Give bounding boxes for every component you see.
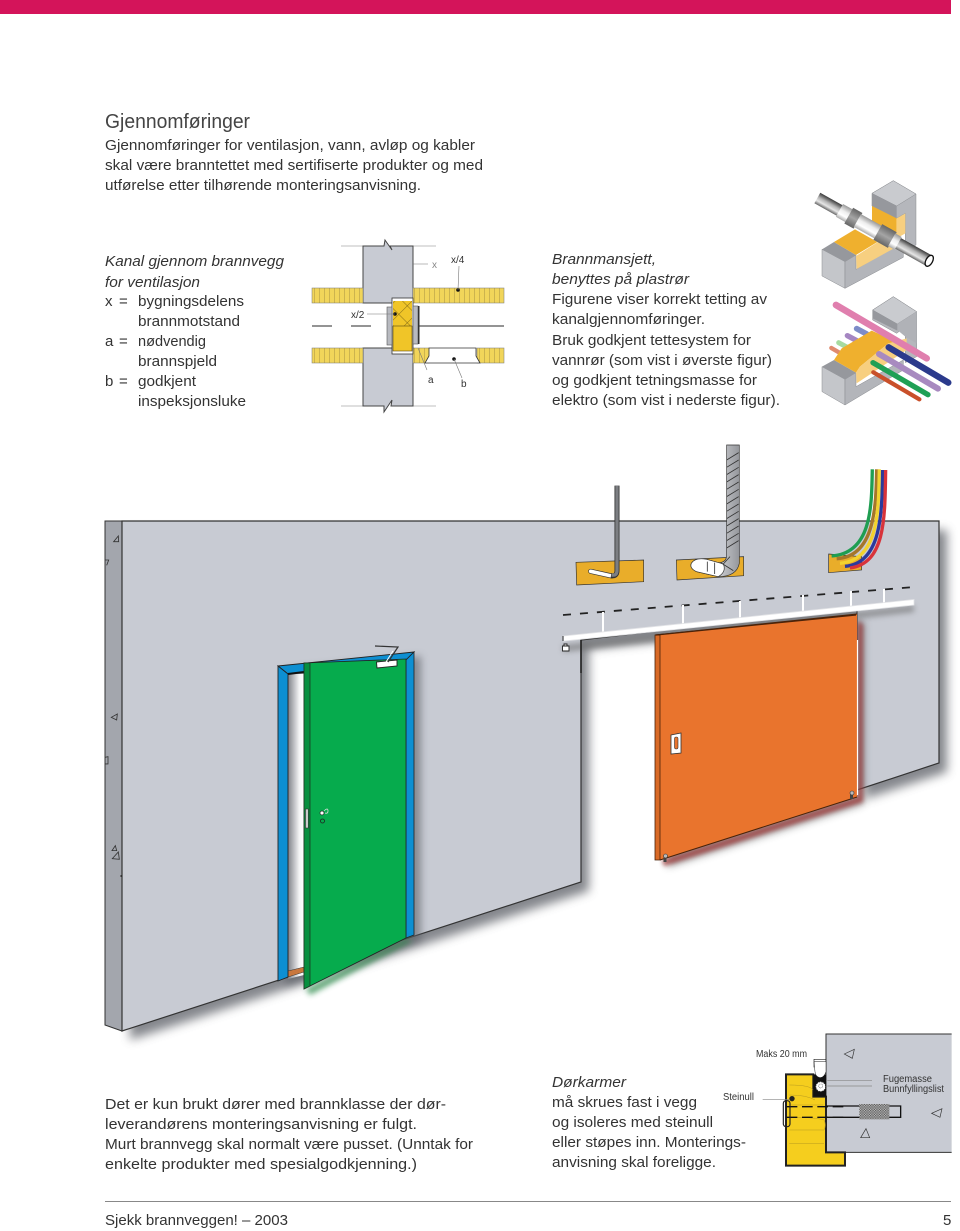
detail screw and anchor <box>787 1107 847 1117</box>
detail dimension lines <box>763 1081 872 1099</box>
diagram: door frame detail: Steinull <box>723 1092 754 1103</box>
text block: door requirements: leverandørens monteringsanvisning er fulgt. <box>105 1116 417 1133</box>
text block: duct through fire wall: = <box>119 293 128 310</box>
rail shadow <box>563 605 914 652</box>
detail sealant <box>813 1074 826 1097</box>
wall end markings <box>105 536 119 859</box>
door hinge plate <box>306 809 308 828</box>
sliding door shadow <box>662 621 864 867</box>
diagram: duct section through wall: a <box>428 375 434 386</box>
intro text: skal være branntettet med sertifiserte produkter og med <box>105 157 483 174</box>
diagram: door frame detail: Fugemasse <box>883 1074 932 1085</box>
diagram: duct section through wall: b <box>461 379 467 390</box>
text block: fire sleeve: Brannmansjett, <box>552 251 656 268</box>
text block: duct through fire wall: godkjent <box>138 373 197 390</box>
top colour bar <box>0 0 951 14</box>
rail and dashed line <box>562 587 915 673</box>
wall side ticks <box>105 875 121 935</box>
door green glow <box>306 939 412 995</box>
intro text <box>105 137 483 194</box>
door handle <box>320 811 324 815</box>
text block: duct through fire wall: Kanal gjennom brannvegg <box>105 253 285 270</box>
text block: fire sleeve: Figurene viser korrekt tetting av <box>552 291 768 308</box>
text block: door frames: må skrues fast i vegg <box>552 1094 697 1111</box>
text block: fire sleeve: og godkjent tetningsmasse for <box>552 372 757 389</box>
text block: door frames: anvisning skal foreligge. <box>552 1154 716 1171</box>
wall end face <box>105 521 122 1031</box>
door frame <box>278 652 414 981</box>
door frame shadow <box>285 656 421 986</box>
text block: fire sleeve: Bruk godkjent tettesystem for <box>552 332 751 349</box>
door closer <box>376 660 397 668</box>
text block: duct through fire wall: bygningsdelens <box>138 293 244 310</box>
diagram: door frame detail: Maks 20 mm <box>756 1049 807 1060</box>
text block: door frames: eller støpes inn. Monterings- <box>552 1134 746 1151</box>
diagram: duct section through wall <box>312 240 504 412</box>
text block: duct through fire wall: = <box>119 373 128 390</box>
foil plate with pipe: ribbed <box>676 445 744 580</box>
text block: duct through fire wall: a <box>105 333 114 350</box>
door guide pins <box>665 792 852 862</box>
diagram: door frame detail <box>723 1034 952 1166</box>
text block: door frames <box>552 1074 746 1171</box>
text block: duct through fire wall: x <box>105 293 113 310</box>
footer: 5 <box>943 1212 951 1229</box>
text block: duct through fire wall <box>105 253 285 410</box>
diagram: pipe through sealed wall <box>813 181 937 288</box>
sliding door <box>655 614 858 862</box>
diagram: duct section through wall: x/2 <box>351 310 365 321</box>
text block: fire sleeve: kanalgjennomføringer. <box>552 311 705 328</box>
detail wall <box>826 1034 952 1152</box>
text block: fire sleeve: elektro (som vist i nederste figur). <box>552 392 780 409</box>
wall shadow <box>130 530 947 1040</box>
text block: door requirements: Det er kun brukt dører med brannklasse der dør- <box>105 1096 446 1113</box>
text block: duct through fire wall: for ventilasjon <box>105 274 200 291</box>
diagram: duct section through wall: x/4 <box>451 255 465 266</box>
detail wall markings <box>844 1049 942 1138</box>
text block: fire sleeve: benyttes på plastrør <box>552 271 690 288</box>
text block: fire sleeve <box>552 251 780 409</box>
text block: duct through fire wall: inspeksjonsluke <box>138 393 246 410</box>
main wall illustration <box>105 445 947 1040</box>
text block: door requirements: enkelte produkter med spesialgodkjenning.) <box>105 1156 417 1173</box>
text block: door requirements: Murt brannvegg skal normalt være pusset. (Unntak for <box>105 1136 473 1153</box>
text block: door requirements <box>105 1096 473 1173</box>
detail frame <box>786 1074 845 1166</box>
sliding door glow <box>662 620 863 866</box>
text block: door frames: Dørkarmer <box>552 1074 627 1091</box>
door handle plate <box>671 733 681 754</box>
footer: Sjekk brannveggen! – 2003 <box>105 1212 288 1229</box>
foil plate with coloured cables <box>829 469 886 573</box>
text block: door frames: og isoleres med steinull <box>552 1114 713 1131</box>
text block: fire sleeve: vannrør (som vist i øverste figur) <box>552 352 772 369</box>
wall front face <box>122 521 939 1031</box>
text block: duct through fire wall: brannmotstand <box>138 313 240 330</box>
title: Gjennomføringer <box>105 111 250 133</box>
intro text: Gjennomføringer for ventilasjon, vann, avløp og kabler <box>105 137 475 154</box>
text block: duct through fire wall: b <box>105 373 113 390</box>
text block: duct through fire wall: = <box>119 333 128 350</box>
text block: duct through fire wall: brannspjeld <box>138 353 217 370</box>
rail end stop <box>562 636 569 651</box>
diagram: duct section through wall: x <box>432 260 437 271</box>
diagram: cables through sealed wall <box>822 297 948 405</box>
foil plate with pipe: steel <box>576 486 644 585</box>
text block: duct through fire wall: nødvendig <box>138 333 206 350</box>
diagram: door frame detail: Bunnfyllingslist <box>883 1084 944 1095</box>
green door <box>304 646 406 989</box>
footer <box>105 1202 951 1229</box>
intro text: utførelse etter tilhørende monteringsanvisning. <box>105 177 421 194</box>
